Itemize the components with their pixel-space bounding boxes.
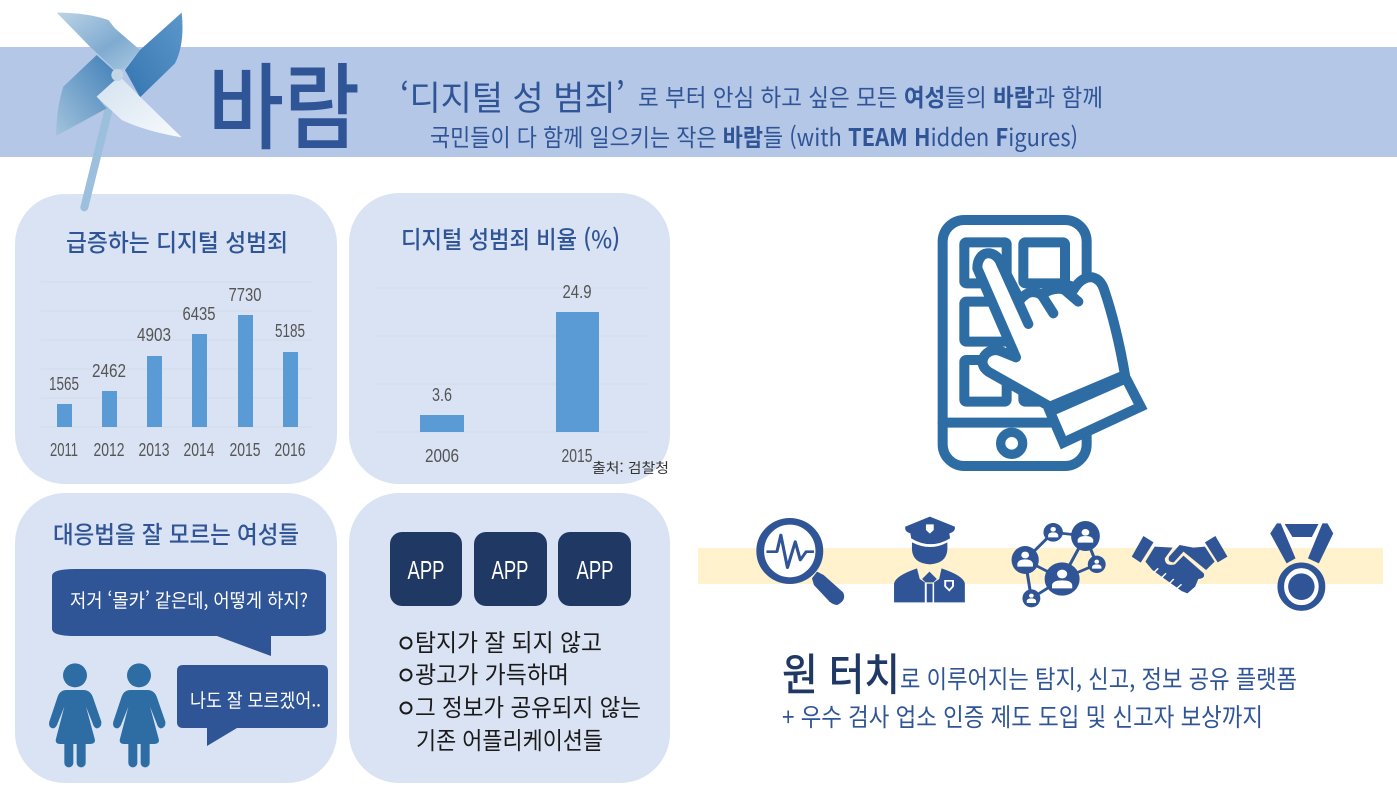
bar chart: yearly crime counts: 5185 bbox=[275, 321, 305, 341]
app tiles: APP bbox=[408, 555, 444, 585]
bar chart: ratio by year: 3.6 bbox=[432, 385, 452, 405]
header subtitle: 로 부터 안심 하고 싶은 모든 여성들의 바람과 함께 bbox=[638, 78, 1103, 113]
bar chart: yearly crime counts bbox=[41, 282, 312, 460]
bar chart: yearly crime counts: 2016 bbox=[274, 440, 306, 460]
panel: digital sex crime ratio bbox=[349, 193, 670, 484]
one touch description: 로 이루어지는 탐지, 신고, 정보 공유 플랫폼 bbox=[900, 660, 1297, 696]
panel: women who do not know how to respond bbox=[15, 493, 337, 783]
icon: two women bbox=[49, 663, 165, 767]
list: app shortcomings: 광고가 가득하며 bbox=[415, 655, 569, 690]
list: app shortcomings bbox=[400, 623, 641, 756]
header subtitle: 국민들이 다 함께 일으키는 작은 바람들 (with TEAM Hidden Figures) bbox=[430, 118, 1078, 153]
bar chart: yearly crime counts: 6435 bbox=[182, 304, 216, 324]
bar chart: yearly crime counts: 7730 bbox=[228, 285, 262, 305]
header subtitle bbox=[400, 71, 1103, 153]
icon row: services bbox=[760, 517, 1333, 608]
app tiles: APP bbox=[576, 555, 614, 585]
icon: magnifier with pulse bbox=[760, 521, 844, 605]
bar chart: yearly crime counts: 1565 bbox=[49, 374, 79, 394]
header banner bbox=[0, 47, 1397, 157]
list: app shortcomings: 탐지가 잘 되지 않고 bbox=[415, 623, 602, 658]
highlight band bbox=[698, 548, 1383, 584]
list: app shortcomings: 기존 어플리케이션들 bbox=[416, 721, 603, 756]
header subtitle: ‘디지털 성 범죄’ bbox=[400, 71, 625, 120]
bar chart: ratio by year: 24.9 bbox=[562, 282, 592, 302]
speech bubble: second woman bbox=[177, 665, 328, 746]
bar chart: ratio by year bbox=[376, 282, 648, 466]
icon: handshake bbox=[1132, 536, 1227, 593]
speech bubble: first woman: 저거 ‘몰카’ 같은데, 어떻게 하지? bbox=[70, 586, 308, 613]
one touch description: + 우수 검사 업소 인증 제도 도입 및 신고자 보상까지 bbox=[782, 698, 1263, 734]
one touch description: 원 터치 bbox=[782, 639, 900, 703]
bar chart: yearly crime counts: 2462 bbox=[92, 361, 126, 381]
bar chart: ratio by year: 2006 bbox=[425, 446, 459, 466]
bar chart: ratio by year: 2015 bbox=[562, 446, 592, 466]
bar chart: yearly crime counts: 2015 bbox=[230, 440, 260, 460]
source note: 출처: 검찰청 bbox=[592, 458, 669, 478]
icon: hand touching smartphone bbox=[943, 220, 1141, 466]
heading: crime ratio: 디지털 성범죄 비율 (%) bbox=[401, 220, 620, 255]
list: app shortcomings: 그 정보가 공유되지 않는 bbox=[415, 688, 641, 723]
title: 바람 bbox=[208, 33, 360, 169]
speech bubble: second woman: 나도 잘 모르겠어.. bbox=[190, 686, 321, 713]
icon: medal bbox=[1270, 523, 1333, 608]
bar chart: yearly crime counts: 2013 bbox=[138, 440, 170, 460]
speech bubble: first woman bbox=[52, 569, 326, 656]
bar chart: yearly crime counts: 2014 bbox=[184, 440, 214, 460]
one touch description bbox=[782, 639, 1297, 734]
bar chart: yearly crime counts: 2012 bbox=[94, 440, 124, 460]
icon: police officer bbox=[894, 517, 965, 602]
app tiles: APP bbox=[492, 555, 528, 585]
panel: existing apps bbox=[349, 493, 670, 783]
icon: pinwheel bbox=[56, 13, 182, 207]
panel: rising digital sex crime bbox=[15, 194, 337, 484]
heading: women unaware: 대응법을 잘 모르는 여성들 bbox=[53, 515, 299, 550]
heading: rising crime: 급증하는 디지털 성범죄 bbox=[66, 223, 288, 258]
app tiles bbox=[390, 532, 631, 606]
bar chart: yearly crime counts: 2011 bbox=[50, 440, 78, 460]
bar chart: yearly crime counts: 4903 bbox=[137, 325, 171, 345]
icon: people network bbox=[1012, 521, 1106, 607]
